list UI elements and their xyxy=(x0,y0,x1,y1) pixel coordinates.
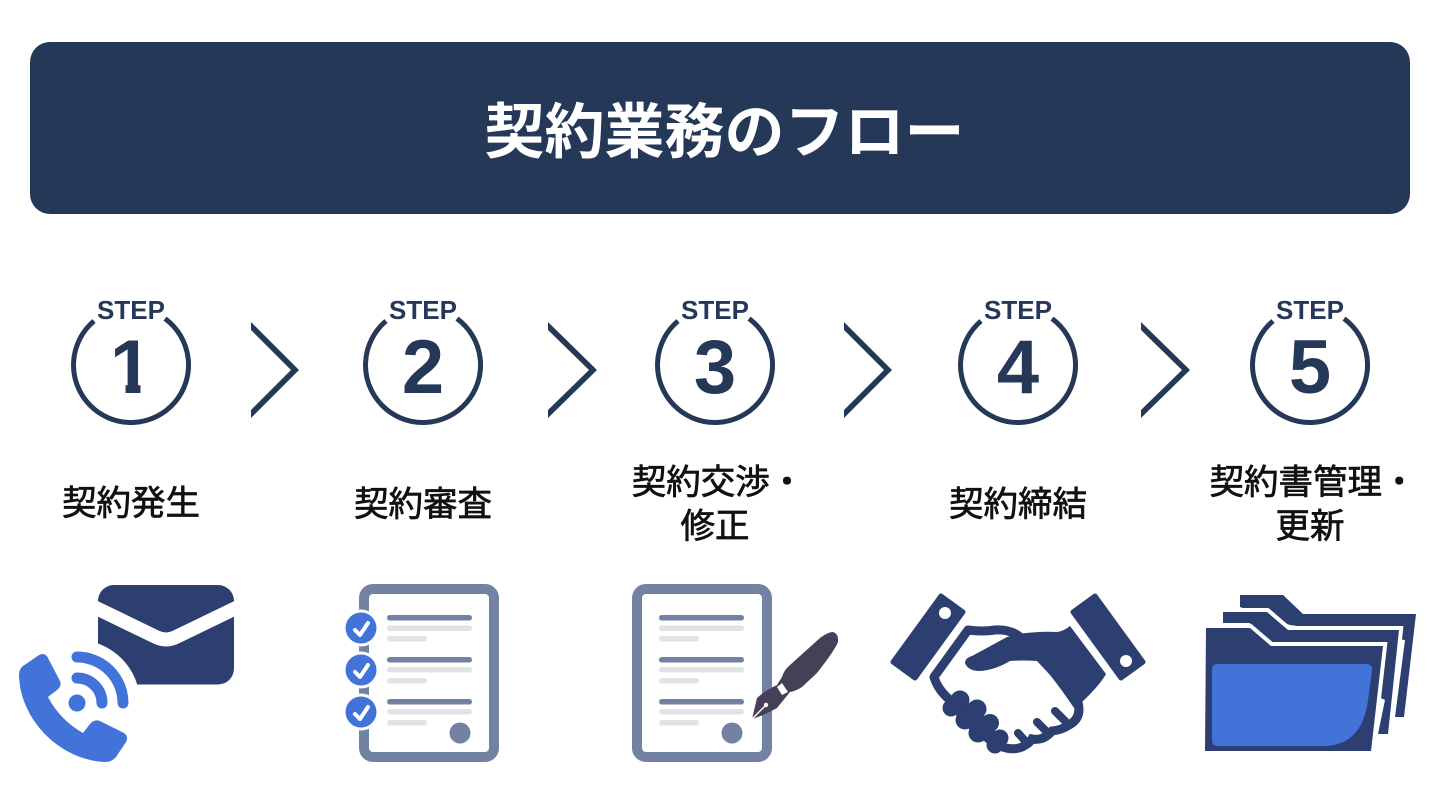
step 1 badge: STEP xyxy=(97,295,165,325)
step label: 契約交渉・修正: 修正 xyxy=(680,498,750,548)
step 2 badge: STEP xyxy=(389,295,457,325)
step label: 契約書管理・更新 xyxy=(1210,454,1416,548)
title banner xyxy=(30,42,1410,214)
step 3 badge: STEP xyxy=(681,295,749,325)
step 2 badge: 2 xyxy=(402,325,444,410)
icon: envelope and phone xyxy=(14,585,238,766)
step 4 badge: 4 xyxy=(997,325,1039,410)
arrow: step 2 to 3 xyxy=(548,322,597,418)
step 4 badge xyxy=(961,295,1076,422)
flow diagram artwork xyxy=(19,300,1416,762)
arrow: step 4 to 5 xyxy=(1141,322,1190,418)
step label: 契約審査: 契約審査 xyxy=(354,476,492,526)
icon: handshake xyxy=(893,596,1143,754)
step label: 契約交渉・修正: 契約交渉・ xyxy=(632,454,804,504)
arrow: step 1 to 2 xyxy=(251,322,299,418)
step label: 契約発生: 契約発生 xyxy=(62,475,200,525)
step 3 badge xyxy=(658,295,773,422)
step 5 badge xyxy=(1253,295,1368,422)
step label: 契約交渉・修正 xyxy=(632,454,804,548)
step label: 契約書管理・更新: 更新 xyxy=(1276,498,1344,548)
icon: checklist document xyxy=(342,589,494,757)
step 5 badge: STEP xyxy=(1276,295,1344,325)
arrow: step 3 to 4 xyxy=(844,322,892,418)
step label: 契約書管理・更新: 契約書管理・ xyxy=(1210,454,1416,504)
step 5 badge: 5 xyxy=(1289,325,1331,410)
icon: document and fountain pen xyxy=(637,589,838,757)
step 3 badge: 3 xyxy=(694,325,736,410)
step label: 契約締結: 契約締結 xyxy=(949,476,1087,526)
icon: folders xyxy=(1205,595,1416,751)
step 1 badge xyxy=(74,295,189,422)
step 1 badge: 1 xyxy=(110,325,152,410)
title: 契約業務のフロー xyxy=(484,84,964,171)
step 2 badge xyxy=(366,295,481,422)
step 4 badge: STEP xyxy=(984,295,1052,325)
